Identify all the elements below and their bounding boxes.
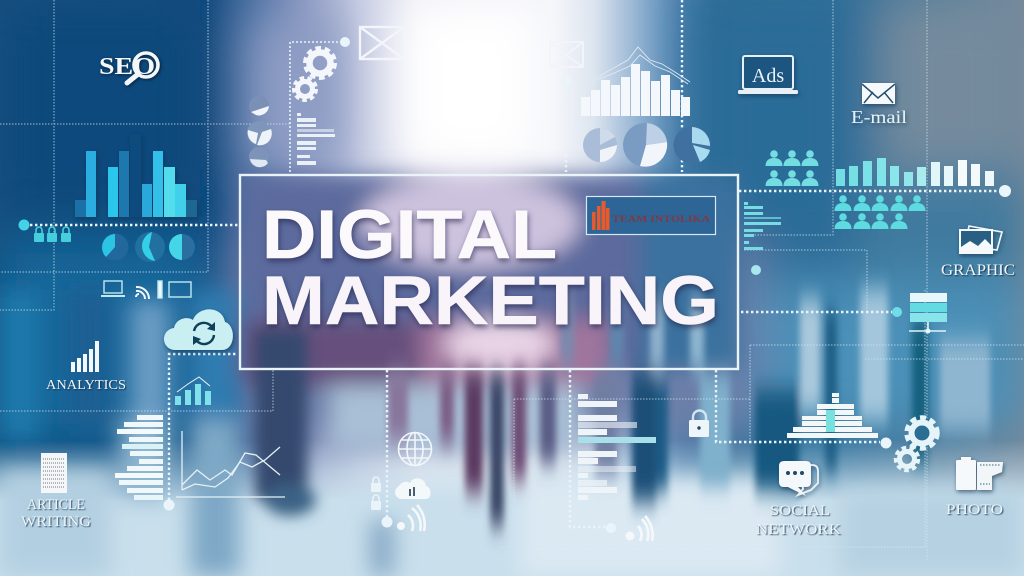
icon: people group lower xyxy=(834,195,926,229)
icon: SEO magnifier label: SEO xyxy=(99,54,155,80)
icon: photo film roll xyxy=(956,457,1003,490)
logo badge: Team Intolika xyxy=(586,196,716,234)
label: ARTICLE WRITING xyxy=(21,497,91,530)
title: DIGITAL: DIGITAL xyxy=(262,196,557,273)
icon: Ads laptop xyxy=(738,56,798,94)
icon: E-mail envelope and label xyxy=(851,83,907,127)
icon: globe xyxy=(398,432,432,466)
icon: gears top xyxy=(294,48,334,100)
icon: cloud with sync arrows xyxy=(164,309,233,350)
horizontal bars: left xyxy=(115,415,163,500)
icon: analytics bars xyxy=(71,341,99,372)
bar and line chart: white top center xyxy=(581,47,690,116)
icon: wifi signal center xyxy=(626,516,653,541)
pyramid histogram xyxy=(787,393,878,438)
icon: small locks xyxy=(371,477,381,510)
label: SOCIAL NETWORK xyxy=(756,503,841,538)
icon: chat bubbles xyxy=(779,461,818,496)
horizontal bars beside title xyxy=(744,202,781,250)
line chart: lower left xyxy=(176,431,285,497)
icon: device row xyxy=(101,281,191,299)
label: ARTICLE WRITING: ARTICLE xyxy=(27,497,85,513)
icon: wifi signal lower left xyxy=(397,505,425,531)
label: PHOTO: PHOTO xyxy=(946,502,1003,518)
label: SOCIAL NETWORK: SOCIAL xyxy=(770,503,830,519)
icon: three locks xyxy=(34,227,71,242)
icon: envelope top center-left xyxy=(360,27,404,59)
label: ARTICLE WRITING: WRITING xyxy=(21,514,91,530)
label: SOCIAL NETWORK: NETWORK xyxy=(756,522,841,538)
bar chart: top left blue xyxy=(75,134,197,217)
title: MARKETING: MARKETING xyxy=(262,262,719,339)
icon: padlock xyxy=(689,410,709,437)
icon: people group top xyxy=(766,150,818,186)
horizontal bars: center lower xyxy=(578,394,656,500)
icon: cloud with transfer arrows xyxy=(395,478,430,499)
icon: Ads laptop: Ads xyxy=(752,65,784,87)
logo badge: Team Intolika: TEAM INTOLIKA xyxy=(612,215,710,225)
main title frame xyxy=(240,175,738,369)
pie charts: left row xyxy=(102,232,195,262)
label: GRAPHIC: GRAPHIC xyxy=(941,262,1015,279)
icon: gears lower right xyxy=(896,418,937,470)
pie charts: top center row xyxy=(583,123,710,167)
icon: E-mail envelope and label: E-mail xyxy=(851,107,907,127)
icon: article page xyxy=(41,453,67,493)
pie charts: small vertical stack xyxy=(247,96,272,167)
horizontal bars beside gears xyxy=(297,113,335,165)
icon: graphic photos xyxy=(960,226,1002,253)
bar chart: teal to white right xyxy=(836,158,994,186)
label: ANALYTICS: ANALYTICS xyxy=(46,378,126,393)
icon: server stack xyxy=(909,293,947,334)
icon: envelope top center-right xyxy=(550,42,583,67)
mini bar and line chart xyxy=(175,377,211,405)
